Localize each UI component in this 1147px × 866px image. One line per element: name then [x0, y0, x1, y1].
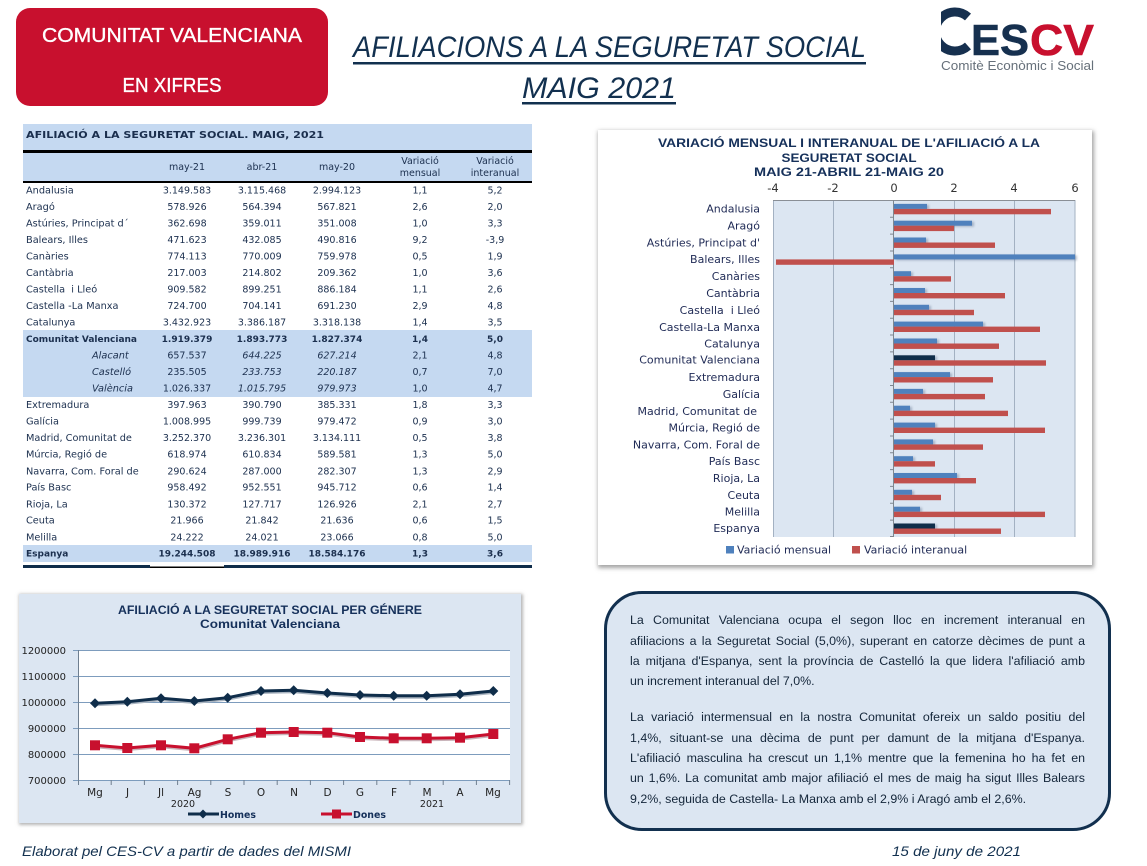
row Extremadura: 390.790	[242, 400, 282, 411]
row Extremadura: 1,8	[412, 400, 428, 411]
line chart title: Comunitat Valenciana	[200, 617, 340, 631]
row Melilla	[26, 532, 503, 544]
row Extremadura: Extremadura	[26, 400, 89, 411]
row Alacant: 627.214	[317, 350, 357, 362]
row Múrcia	[26, 448, 503, 460]
row València: 979.973	[317, 384, 357, 394]
row Alacant: 2,1	[412, 350, 428, 362]
row Balears: 9,2	[412, 235, 428, 246]
row Astúries: Astúries, Principat d´	[26, 218, 129, 230]
table header: may-21	[169, 162, 205, 173]
series Dones	[90, 727, 498, 753]
row País Basc: 952.551	[242, 482, 282, 494]
summary paragraph 2: 1,4%, situant-se una dècima de punt per damunt de la mitjana d'Espanya.	[630, 731, 1085, 745]
row Múrcia: Múrcia, Regió de	[26, 448, 107, 460]
row Melilla: 24.222	[170, 532, 204, 544]
main title: AFILIACIONS A LA SEGURETAT SOCIAL	[351, 31, 866, 64]
x axis labels: M	[422, 787, 432, 799]
row Balears: 432.085	[242, 235, 282, 246]
footer source and date: 15 de juny de 2021	[892, 843, 1021, 859]
table header: mensual	[400, 168, 440, 179]
row País Basc	[26, 482, 503, 494]
bar chart legend	[726, 544, 967, 556]
row Navarra	[26, 466, 503, 478]
line chart legend: Dones	[353, 810, 386, 821]
x axis labels: O	[257, 787, 265, 799]
summary paragraph 2: un 1,6%. La comunitat amb major afiliació el mes de maig ha sigut Illes Balears	[630, 771, 1085, 785]
row Alacant: 644.225	[242, 350, 282, 362]
x axis labels: G	[356, 787, 364, 799]
category labels: Catalunya	[704, 338, 760, 350]
plot area	[773, 200, 1075, 537]
category labels: Comunitat Valenciana	[639, 354, 760, 366]
row València: 4,7	[487, 384, 503, 394]
main title	[351, 31, 866, 105]
row Balears: -3,9	[486, 235, 504, 246]
category labels: Rioja, La	[713, 472, 760, 485]
bar chart title: SEGURETAT SOCIAL	[782, 151, 916, 165]
row Extremadura	[26, 400, 503, 411]
row Madrid	[26, 433, 503, 444]
row Castella i Lleó: 899.251	[242, 284, 282, 296]
table header: Variació	[401, 156, 439, 167]
bar chart title	[658, 135, 1040, 179]
row Alacant: Alacant	[91, 350, 130, 362]
row Balears: 490.816	[317, 235, 357, 246]
row Cantàbria: 1,0	[412, 268, 428, 279]
row Múrcia: 1,3	[412, 450, 428, 460]
table header: abr-21	[247, 162, 277, 173]
category labels: Balears, Illes	[690, 253, 760, 266]
top axis labels: 2	[950, 181, 958, 195]
row Castella-La Manxa: Castella -La Manxa	[26, 301, 119, 312]
row Andalusia: 5,2	[487, 186, 503, 196]
line chart legend: Homes	[220, 810, 256, 821]
top axis labels	[767, 181, 1079, 195]
row Castelló: 233.753	[242, 367, 282, 378]
x axis labels: N	[290, 787, 298, 799]
row Castella i Lleó: 1,1	[412, 284, 428, 296]
y axis labels: 900000	[28, 724, 66, 735]
row Astúries: 1,0	[412, 218, 428, 230]
category labels: Cantàbria	[706, 287, 760, 300]
top axis labels: 6	[1071, 181, 1079, 195]
row Ceuta: Ceuta	[26, 516, 55, 526]
row País Basc: País Basc	[26, 482, 71, 494]
category labels: Castella i Lleó	[680, 304, 760, 317]
row Aragó: Aragó	[26, 201, 55, 213]
row Cantàbria: 3,6	[487, 268, 503, 279]
table header: may-20	[319, 162, 355, 173]
row Catalunya: 1,4	[412, 318, 428, 328]
row Melilla: 23.066	[320, 532, 354, 544]
row Rioja: 130.372	[167, 500, 207, 510]
row Castelló: 235.505	[167, 367, 207, 378]
category labels: Extremadura	[688, 371, 760, 384]
row Navarra: 1,3	[412, 466, 428, 478]
row Madrid: Madrid, Comunitat de	[26, 433, 132, 444]
row Ceuta: 0,6	[412, 516, 428, 526]
row Castelló: 220.187	[317, 367, 357, 378]
row Castella-La Manxa: 4,8	[487, 301, 503, 312]
row Catalunya: 3.386.187	[238, 318, 286, 328]
category labels: Castella-La Manxa	[659, 321, 760, 334]
row Cantàbria	[26, 267, 503, 279]
bar chart legend: Variació interanual	[864, 544, 967, 556]
row Madrid: 3.134.111	[313, 433, 361, 444]
row Galícia: 0,9	[412, 416, 428, 428]
plot area	[73, 650, 510, 785]
category labels: País Basc	[709, 455, 760, 468]
row Andalusia: 3.115.468	[238, 186, 286, 196]
summary paragraph 2: L'afiliació masculina ha crescut un 1,1% mentre que la femenina ho ha fet en	[630, 751, 1085, 765]
row Balears	[26, 235, 504, 246]
top axis labels: -4	[767, 181, 779, 195]
row Catalunya: 3,5	[487, 318, 503, 328]
row Navarra: 290.624	[167, 466, 207, 478]
x axis labels: F	[391, 787, 397, 799]
row Cantàbria: 217.003	[167, 268, 207, 279]
row Navarra: 287.000	[242, 466, 282, 478]
row Catalunya: 3.432.923	[163, 318, 211, 328]
x axis labels: 2020	[171, 799, 195, 810]
table title: AFILIACIÓ A LA SEGURETAT SOCIAL. MAIG, 2021	[26, 128, 324, 141]
x axis labels: Mg	[87, 787, 103, 799]
row Espanya: 3,6	[487, 550, 503, 560]
category labels: Múrcia, Regió de	[668, 422, 760, 434]
row Canàries: 759.978	[317, 252, 357, 262]
summary paragraph 1	[630, 613, 1085, 688]
row Madrid: 3.252.370	[163, 433, 211, 444]
row Castella-La Manxa: 724.700	[167, 301, 207, 312]
row Alacant	[91, 350, 503, 362]
y axis labels: 700000	[28, 776, 66, 787]
summary paragraph 2: 9,2%, seguida de Castella- La Manxa amb el 2,9% i Aragó amb el 2,6%.	[630, 792, 1026, 806]
top axis labels: 4	[1010, 181, 1018, 195]
row València: 1.026.337	[163, 384, 211, 394]
monthly variation bars	[894, 204, 1075, 528]
row Astúries: 3,3	[487, 218, 503, 230]
row Ceuta	[26, 516, 503, 526]
row Castella i Lleó	[26, 284, 503, 296]
row Múrcia: 5,0	[487, 450, 503, 460]
row Ceuta: 21.842	[245, 516, 279, 526]
summary paragraph 2: La variació intermensual en la nostra Comunitat ofereix un saldo positiu del	[630, 710, 1085, 724]
row Galícia: Galícia	[26, 416, 59, 428]
row Galícia	[26, 416, 503, 428]
x axis labels: D	[323, 787, 332, 799]
logo CESCV	[941, 8, 1095, 73]
row Comunitat Valenciana: 1.893.773	[237, 335, 287, 345]
row Canàries	[26, 250, 503, 262]
row València	[92, 382, 503, 394]
row Castelló	[92, 366, 503, 378]
row Rioja: 127.717	[242, 500, 282, 510]
row Canàries: 1,9	[487, 252, 503, 262]
row Melilla: 0,8	[412, 532, 428, 544]
row Catalunya	[26, 318, 503, 328]
y axis labels: 1100000	[21, 672, 66, 683]
row Aragó: 2,0	[487, 202, 503, 213]
table header: Variació	[476, 156, 514, 167]
row Extremadura: 3,3	[487, 400, 503, 411]
row Alacant: 657.537	[167, 350, 207, 362]
row Catalunya: 3.318.138	[313, 318, 361, 328]
row Galícia: 3,0	[487, 416, 503, 428]
row Castella-La Manxa: 691.230	[317, 301, 357, 312]
row Madrid: 3,8	[487, 433, 503, 444]
data table	[23, 124, 532, 568]
y axis labels: 1000000	[21, 698, 66, 709]
category labels: Ceuta	[728, 489, 760, 502]
row Canàries: 774.113	[167, 252, 207, 262]
row Andalusia	[26, 186, 503, 196]
row Aragó	[26, 201, 503, 213]
row Rioja: 126.926	[317, 500, 357, 510]
row Rioja: Rioja, La	[26, 500, 68, 510]
table header	[169, 156, 519, 179]
row Madrid: 0,5	[412, 433, 428, 444]
row Catalunya: Catalunya	[26, 318, 75, 328]
bar chart title: MAIG 21-ABRIL 21-MAIG 20	[754, 165, 944, 179]
row Cantàbria: 209.362	[317, 268, 357, 279]
row Comunitat Valenciana: 1.827.374	[312, 335, 362, 345]
row València: 1,0	[412, 384, 428, 394]
row País Basc: 1,4	[487, 482, 503, 494]
category labels: Navarra, Com. Foral de	[633, 438, 760, 452]
top axis labels: 0	[890, 181, 898, 195]
bar chart legend: Variació mensual	[737, 544, 831, 556]
category labels: Aragó	[727, 220, 760, 232]
row Castelló: 0,7	[412, 367, 428, 378]
row Extremadura: 385.331	[317, 400, 357, 411]
red header badge	[16, 8, 328, 106]
row Castelló: 7,0	[487, 367, 503, 378]
series Homes	[90, 685, 498, 708]
row Galícia: 999.739	[242, 416, 282, 428]
row Galícia: 1.008.995	[163, 416, 211, 428]
table header: interanual	[471, 168, 519, 179]
row Canàries: 770.009	[242, 252, 282, 262]
row Rioja	[26, 500, 503, 510]
row Comunitat Valenciana	[26, 335, 503, 345]
red header badge: COMUNITAT VALENCIANA	[42, 25, 303, 47]
summary paragraph 1: afiliacions a la Seguretat Social (5,0%), superant en catorze dècimes de punt a	[630, 634, 1085, 648]
row Rioja: 2,1	[412, 500, 428, 510]
row Espanya: Espanya	[26, 550, 68, 560]
row Aragó: 578.926	[167, 202, 207, 213]
row Aragó: 567.821	[317, 202, 357, 213]
category labels: Andalusia	[706, 202, 760, 216]
category labels: Espanya	[713, 522, 760, 535]
row Extremadura: 397.963	[167, 400, 207, 411]
row Melilla: Melilla	[26, 532, 57, 544]
row Cantàbria: 214.802	[242, 268, 282, 279]
row País Basc: 0,6	[412, 482, 428, 494]
row Rioja: 2,7	[487, 500, 503, 510]
line chart legend	[188, 810, 386, 821]
row Melilla: 24.021	[245, 532, 279, 544]
row Astúries	[26, 218, 503, 230]
row Astúries: 359.011	[242, 218, 282, 230]
x axis labels: A	[456, 787, 464, 799]
row Castella-La Manxa: 2,9	[412, 301, 428, 312]
category labels: Melilla	[725, 506, 760, 518]
row Galícia: 979.472	[317, 416, 357, 428]
y axis labels: 1200000	[21, 646, 66, 657]
logo CESCV: ES	[971, 16, 1029, 65]
line chart title: AFILIACIÓ A LA SEGURETAT SOCIAL PER GÉNERE	[118, 602, 422, 617]
category labels: Canàries	[712, 270, 760, 283]
row València: València	[92, 382, 133, 394]
panel: line chart gender	[19, 594, 521, 823]
logo CESCV: Comitè Econòmic i Social	[941, 59, 1094, 73]
row Astúries: 362.698	[167, 218, 207, 230]
row Castella i Lleó: 909.582	[167, 284, 207, 296]
top axis labels: -2	[827, 181, 839, 195]
row Castella i Lleó: 2,6	[487, 284, 503, 296]
row País Basc: 958.492	[167, 482, 207, 494]
row Alacant: 4,8	[487, 350, 503, 362]
row Andalusia: Andalusia	[26, 186, 74, 196]
row Andalusia: 1,1	[412, 186, 428, 196]
main title: MAIG 2021	[522, 72, 676, 105]
x axis labels	[87, 787, 501, 810]
y axis labels: 800000	[28, 750, 66, 761]
row Balears: Balears, Illes	[26, 235, 88, 246]
x axis labels: Mg	[485, 787, 501, 799]
y axis labels	[21, 646, 66, 787]
logo CESCV: CV	[1030, 16, 1095, 65]
row Múrcia: 589.581	[317, 450, 357, 460]
footer source and date: Elaborat pel CES-CV a partir de dades del MISMI	[22, 843, 351, 859]
row Múrcia: 610.834	[242, 450, 282, 460]
row València: 1.015.795	[238, 384, 286, 394]
row Espanya: 18.989.916	[234, 550, 290, 560]
row Madrid: 3.236.301	[238, 433, 286, 444]
panel: summary text	[604, 591, 1111, 831]
row Comunitat Valenciana: 5,0	[487, 335, 503, 345]
x axis labels: 2021	[420, 799, 444, 810]
row Balears: 471.623	[167, 235, 207, 246]
panel: bar chart variation	[598, 130, 1092, 565]
row Andalusia: 2.994.123	[313, 186, 361, 196]
category labels	[633, 202, 760, 535]
row Canàries: Canàries	[26, 250, 69, 262]
summary paragraph 1: La Comunitat Valenciana ocupa el segon lloc en increment interanual en	[630, 613, 1085, 627]
x axis labels: Jl	[157, 787, 164, 799]
category labels: Galícia	[723, 388, 760, 401]
row Espanya: 1,3	[412, 550, 428, 560]
x axis labels: Ag	[188, 787, 201, 799]
row Ceuta: 1,5	[487, 516, 503, 526]
row Comunitat Valenciana: 1.919.379	[162, 335, 212, 345]
row Comunitat Valenciana: Comunitat Valenciana	[26, 335, 137, 345]
row Castelló: Castelló	[92, 366, 131, 378]
row Aragó: 564.394	[242, 202, 282, 213]
x axis labels: J	[125, 787, 129, 799]
row Canàries: 0,5	[412, 252, 428, 262]
row Navarra: Navarra, Com. Foral de	[26, 466, 139, 478]
row Castella-La Manxa	[26, 301, 503, 312]
row Aragó: 2,6	[412, 202, 428, 213]
row Ceuta: 21.966	[170, 516, 204, 526]
row Castella i Lleó: Castella i Lleó	[26, 284, 97, 296]
category labels: Madrid, Comunitat de	[637, 405, 757, 418]
summary paragraph 1: la mitjana d'Espanya, sent la província de Castelló la que lidera l'afiliació amb	[630, 654, 1085, 668]
row País Basc: 945.712	[317, 482, 357, 494]
category labels: Astúries, Principat d'	[647, 236, 760, 250]
bar chart title: VARIACIÓ MENSUAL I INTERANUAL DE L'AFILIACIÓ A LA	[658, 135, 1040, 150]
red header badge: EN XIFRES	[122, 75, 222, 97]
summary paragraph 1: un increment interanual del 7,0%.	[630, 674, 815, 688]
line chart title	[118, 602, 422, 631]
row Ceuta: 21.636	[320, 516, 354, 526]
row Castella i Lleó: 886.184	[317, 284, 357, 296]
row Melilla: 5,0	[487, 532, 503, 544]
row Navarra: 282.307	[317, 466, 357, 478]
annual variation bars	[776, 209, 1051, 534]
summary paragraph 2	[630, 710, 1085, 806]
row Múrcia: 618.974	[167, 450, 207, 460]
row Espanya	[26, 550, 503, 560]
row Cantàbria: Cantàbria	[26, 267, 74, 279]
row Comunitat Valenciana: 1,4	[412, 335, 428, 345]
row Astúries: 351.008	[317, 218, 357, 230]
x axis labels: S	[225, 787, 232, 799]
row Castella-La Manxa: 704.141	[242, 301, 282, 312]
row Navarra: 2,9	[487, 466, 503, 478]
row Espanya: 19.244.508	[159, 550, 215, 560]
row Andalusia: 3.149.583	[163, 186, 211, 196]
row Espanya: 18.584.176	[309, 550, 365, 560]
